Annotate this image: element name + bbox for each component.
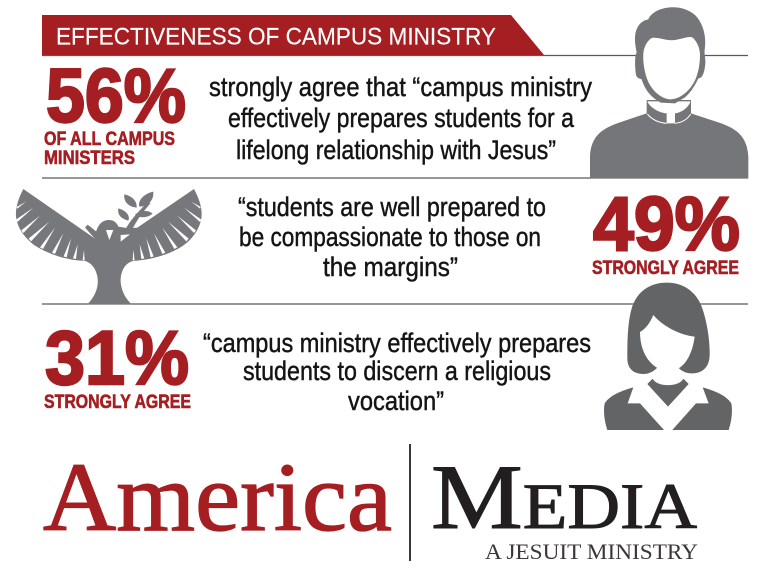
text block: lifelong relationship quote	[209, 72, 592, 165]
text block: lifelong relationship quote: effectively prepares students for a	[228, 103, 575, 133]
text block: religious vocation quote: “campus ministry effectively prepares	[203, 328, 591, 358]
stat: 31% strongly agree: STRONGLY AGREE	[44, 391, 191, 413]
text block: lifelong relationship quote: strongly agree that “campus ministry	[209, 72, 592, 102]
icon: priest	[590, 7, 748, 178]
logo tagline: A JESUIT MINISTRY	[485, 539, 698, 564]
text block: compassion quote: “students are well prepared to	[238, 192, 546, 222]
text block: religious vocation quote: students to discern a religious	[243, 356, 551, 386]
text block: lifelong relationship quote: lifelong relationship with Jesus”	[236, 135, 556, 165]
text block: compassion quote: the margins”	[323, 252, 458, 282]
stat: 56% of all campus ministers: MINISTERS	[44, 147, 135, 169]
icon: woman	[604, 283, 732, 430]
text block: compassion quote	[238, 192, 546, 282]
stat: 31% strongly agree: 31%	[45, 316, 189, 401]
logo: Media: MEDIA	[431, 446, 697, 548]
stat: 49% strongly agree: 49%	[593, 182, 740, 267]
text block: religious vocation quote: vocation”	[348, 386, 444, 416]
header banner: EFFECTIVENESS OF CAMPUS MINISTRY	[56, 24, 496, 50]
text block: compassion quote: be compassionate to those on	[239, 222, 541, 252]
text block: religious vocation quote	[203, 328, 591, 416]
icon: dove with olive branch	[16, 189, 202, 304]
header banner	[42, 15, 544, 55]
stat: 56% of all campus ministers	[44, 54, 186, 169]
stat: 56% of all campus ministers: OF ALL CAMPUS	[44, 128, 175, 150]
stat: 56% of all campus ministers: 56%	[46, 54, 186, 139]
logo: America: America	[43, 444, 392, 551]
logo divider	[409, 444, 411, 561]
